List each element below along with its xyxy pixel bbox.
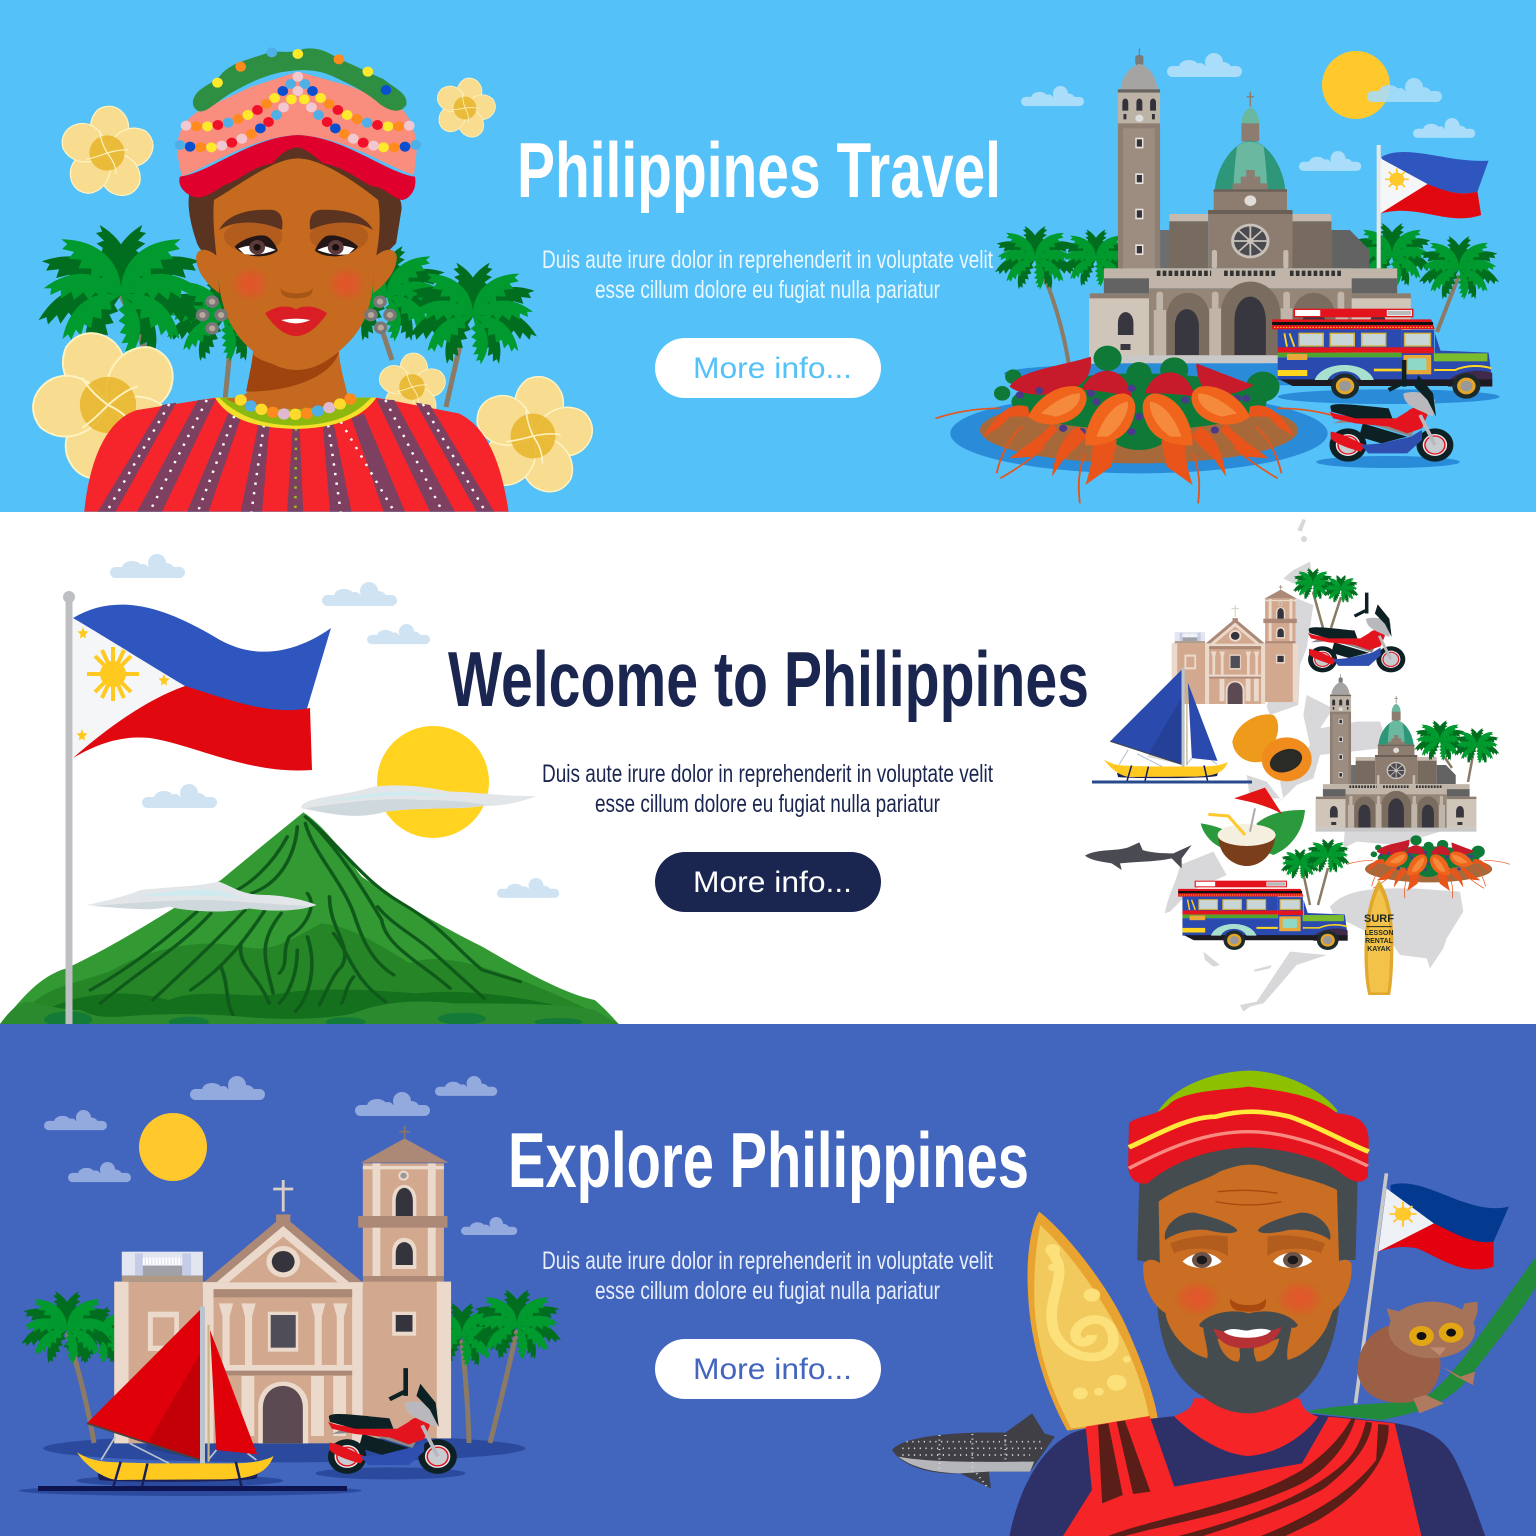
sun	[377, 726, 489, 838]
sun	[1322, 51, 1390, 119]
ground shadows	[19, 1434, 525, 1496]
map: lower palms	[1280, 837, 1351, 880]
moustache and goatee	[1199, 1311, 1298, 1393]
whale shark	[892, 1413, 1055, 1488]
eye shadows	[1170, 1235, 1325, 1257]
button	[655, 338, 881, 398]
torso	[1009, 1413, 1485, 1536]
dress dots	[107, 400, 485, 512]
map: seafood plate	[1347, 835, 1510, 898]
headdress pink	[177, 72, 417, 177]
jeepney	[1272, 309, 1492, 399]
map: blue sailboat	[1092, 668, 1252, 782]
map: cathedral	[1316, 674, 1476, 832]
body text: esse cillum dolore eu fugiat nulla pariatur	[595, 1277, 940, 1305]
collar	[215, 398, 376, 429]
ground shadow	[950, 363, 1411, 473]
panel: top banner, Philippines Travel	[0, 0, 1536, 514]
lips	[265, 306, 327, 336]
Philippine flag	[73, 605, 331, 771]
face	[213, 158, 380, 370]
panel: bottom banner, Explore Philippines	[0, 1024, 1536, 1536]
map: surfboard: LESSON	[1365, 930, 1393, 937]
body text: esse cillum dolore eu fugiat nulla pariatur	[595, 790, 940, 818]
crown beads	[212, 47, 391, 95]
body text	[542, 1247, 993, 1305]
headdress beads	[175, 72, 421, 152]
map: palms	[1292, 567, 1473, 905]
title: Philippines Travel	[517, 126, 1001, 214]
cloud over sun	[1367, 78, 1442, 102]
green branch	[1306, 1257, 1536, 1420]
necklace	[235, 393, 356, 420]
mouth	[1213, 1327, 1281, 1348]
right eye	[1273, 1252, 1312, 1268]
leaf crown	[196, 51, 403, 108]
ground under cathedral	[1004, 361, 1500, 404]
body text	[542, 246, 993, 304]
neck	[226, 350, 348, 409]
body text: Duis aute irure dolor in reprehenderit in voluptate velit	[542, 760, 993, 788]
headdress red band	[179, 135, 415, 200]
left eye	[235, 235, 278, 256]
cathedral	[1089, 48, 1411, 363]
hair and beard	[1137, 1143, 1358, 1413]
volcano	[0, 812, 619, 1027]
map: papaya	[1232, 714, 1312, 781]
button: More info...	[693, 1353, 852, 1386]
map: whale shark	[1085, 842, 1192, 870]
tarsier	[1357, 1302, 1478, 1413]
map: jeepney	[1178, 881, 1348, 950]
flag	[1356, 1173, 1509, 1403]
map: cathedral palms	[1413, 719, 1501, 765]
body text	[542, 760, 993, 818]
white clouds	[86, 785, 536, 911]
button	[655, 1339, 881, 1399]
clouds	[1021, 53, 1475, 171]
title: Explore Philippines	[508, 1116, 1029, 1204]
map: surfboard: RENTAL	[1365, 938, 1394, 945]
chin skin	[1218, 1338, 1279, 1362]
flag sun	[87, 647, 139, 701]
button: More info...	[693, 866, 852, 899]
button	[655, 852, 881, 912]
seafood plate	[936, 346, 1342, 503]
body text: Duis aute irure dolor in reprehenderit in voluptate velit	[542, 246, 993, 274]
body text: esse cillum dolore eu fugiat nulla pariatur	[595, 276, 940, 304]
motorbike	[328, 1368, 457, 1474]
motorbike	[1329, 360, 1453, 462]
neck scarf	[1174, 1398, 1318, 1456]
map: motorbike	[1308, 593, 1405, 672]
motorbike shadow	[1316, 456, 1460, 468]
hat	[1128, 1071, 1369, 1184]
man scene	[892, 1071, 1536, 1536]
map: surfboard: SURF	[1364, 913, 1394, 925]
map: surfboard	[1364, 880, 1394, 995]
map: surfboard: KAYAK	[1367, 946, 1391, 953]
left palm trees	[33, 220, 541, 407]
dress stripes	[98, 399, 494, 512]
sun	[139, 1113, 207, 1181]
body text: Duis aute irure dolor in reprehenderit in voluptate velit	[542, 1247, 993, 1275]
palms	[18, 1287, 564, 1443]
flowers	[10, 68, 610, 514]
forehead wrinkles	[1215, 1190, 1281, 1205]
title: Welcome to Philippines	[448, 635, 1089, 723]
ears	[196, 250, 397, 293]
eye shadow	[224, 221, 368, 253]
map: coconut drink	[1201, 788, 1305, 866]
map: church	[1172, 585, 1298, 704]
button: More info...	[693, 352, 852, 385]
dress	[84, 398, 509, 512]
flag pole	[63, 591, 75, 1024]
nose	[281, 288, 313, 298]
right eye	[315, 235, 358, 256]
cheeks	[231, 266, 366, 302]
panel: middle banner, Welcome to Philippines	[0, 512, 1536, 1027]
red vest	[1063, 1416, 1421, 1536]
left eye	[1183, 1252, 1222, 1268]
cheeks	[1173, 1280, 1324, 1317]
nose	[1230, 1298, 1266, 1312]
brows	[1165, 1213, 1330, 1240]
clouds	[110, 554, 559, 898]
hair	[189, 147, 402, 267]
brows	[219, 210, 373, 230]
red sailboat	[38, 1307, 347, 1488]
palms right	[992, 221, 1502, 365]
surfboard	[1027, 1212, 1158, 1431]
flag	[1379, 145, 1489, 268]
woman in traditional dress	[84, 47, 509, 512]
face	[1159, 1165, 1339, 1360]
map of islands	[1165, 519, 1463, 1012]
vest stripes	[1098, 1418, 1389, 1536]
clouds	[44, 1076, 517, 1235]
church	[114, 1126, 451, 1443]
earrings	[197, 297, 395, 333]
ears	[1143, 1260, 1352, 1313]
